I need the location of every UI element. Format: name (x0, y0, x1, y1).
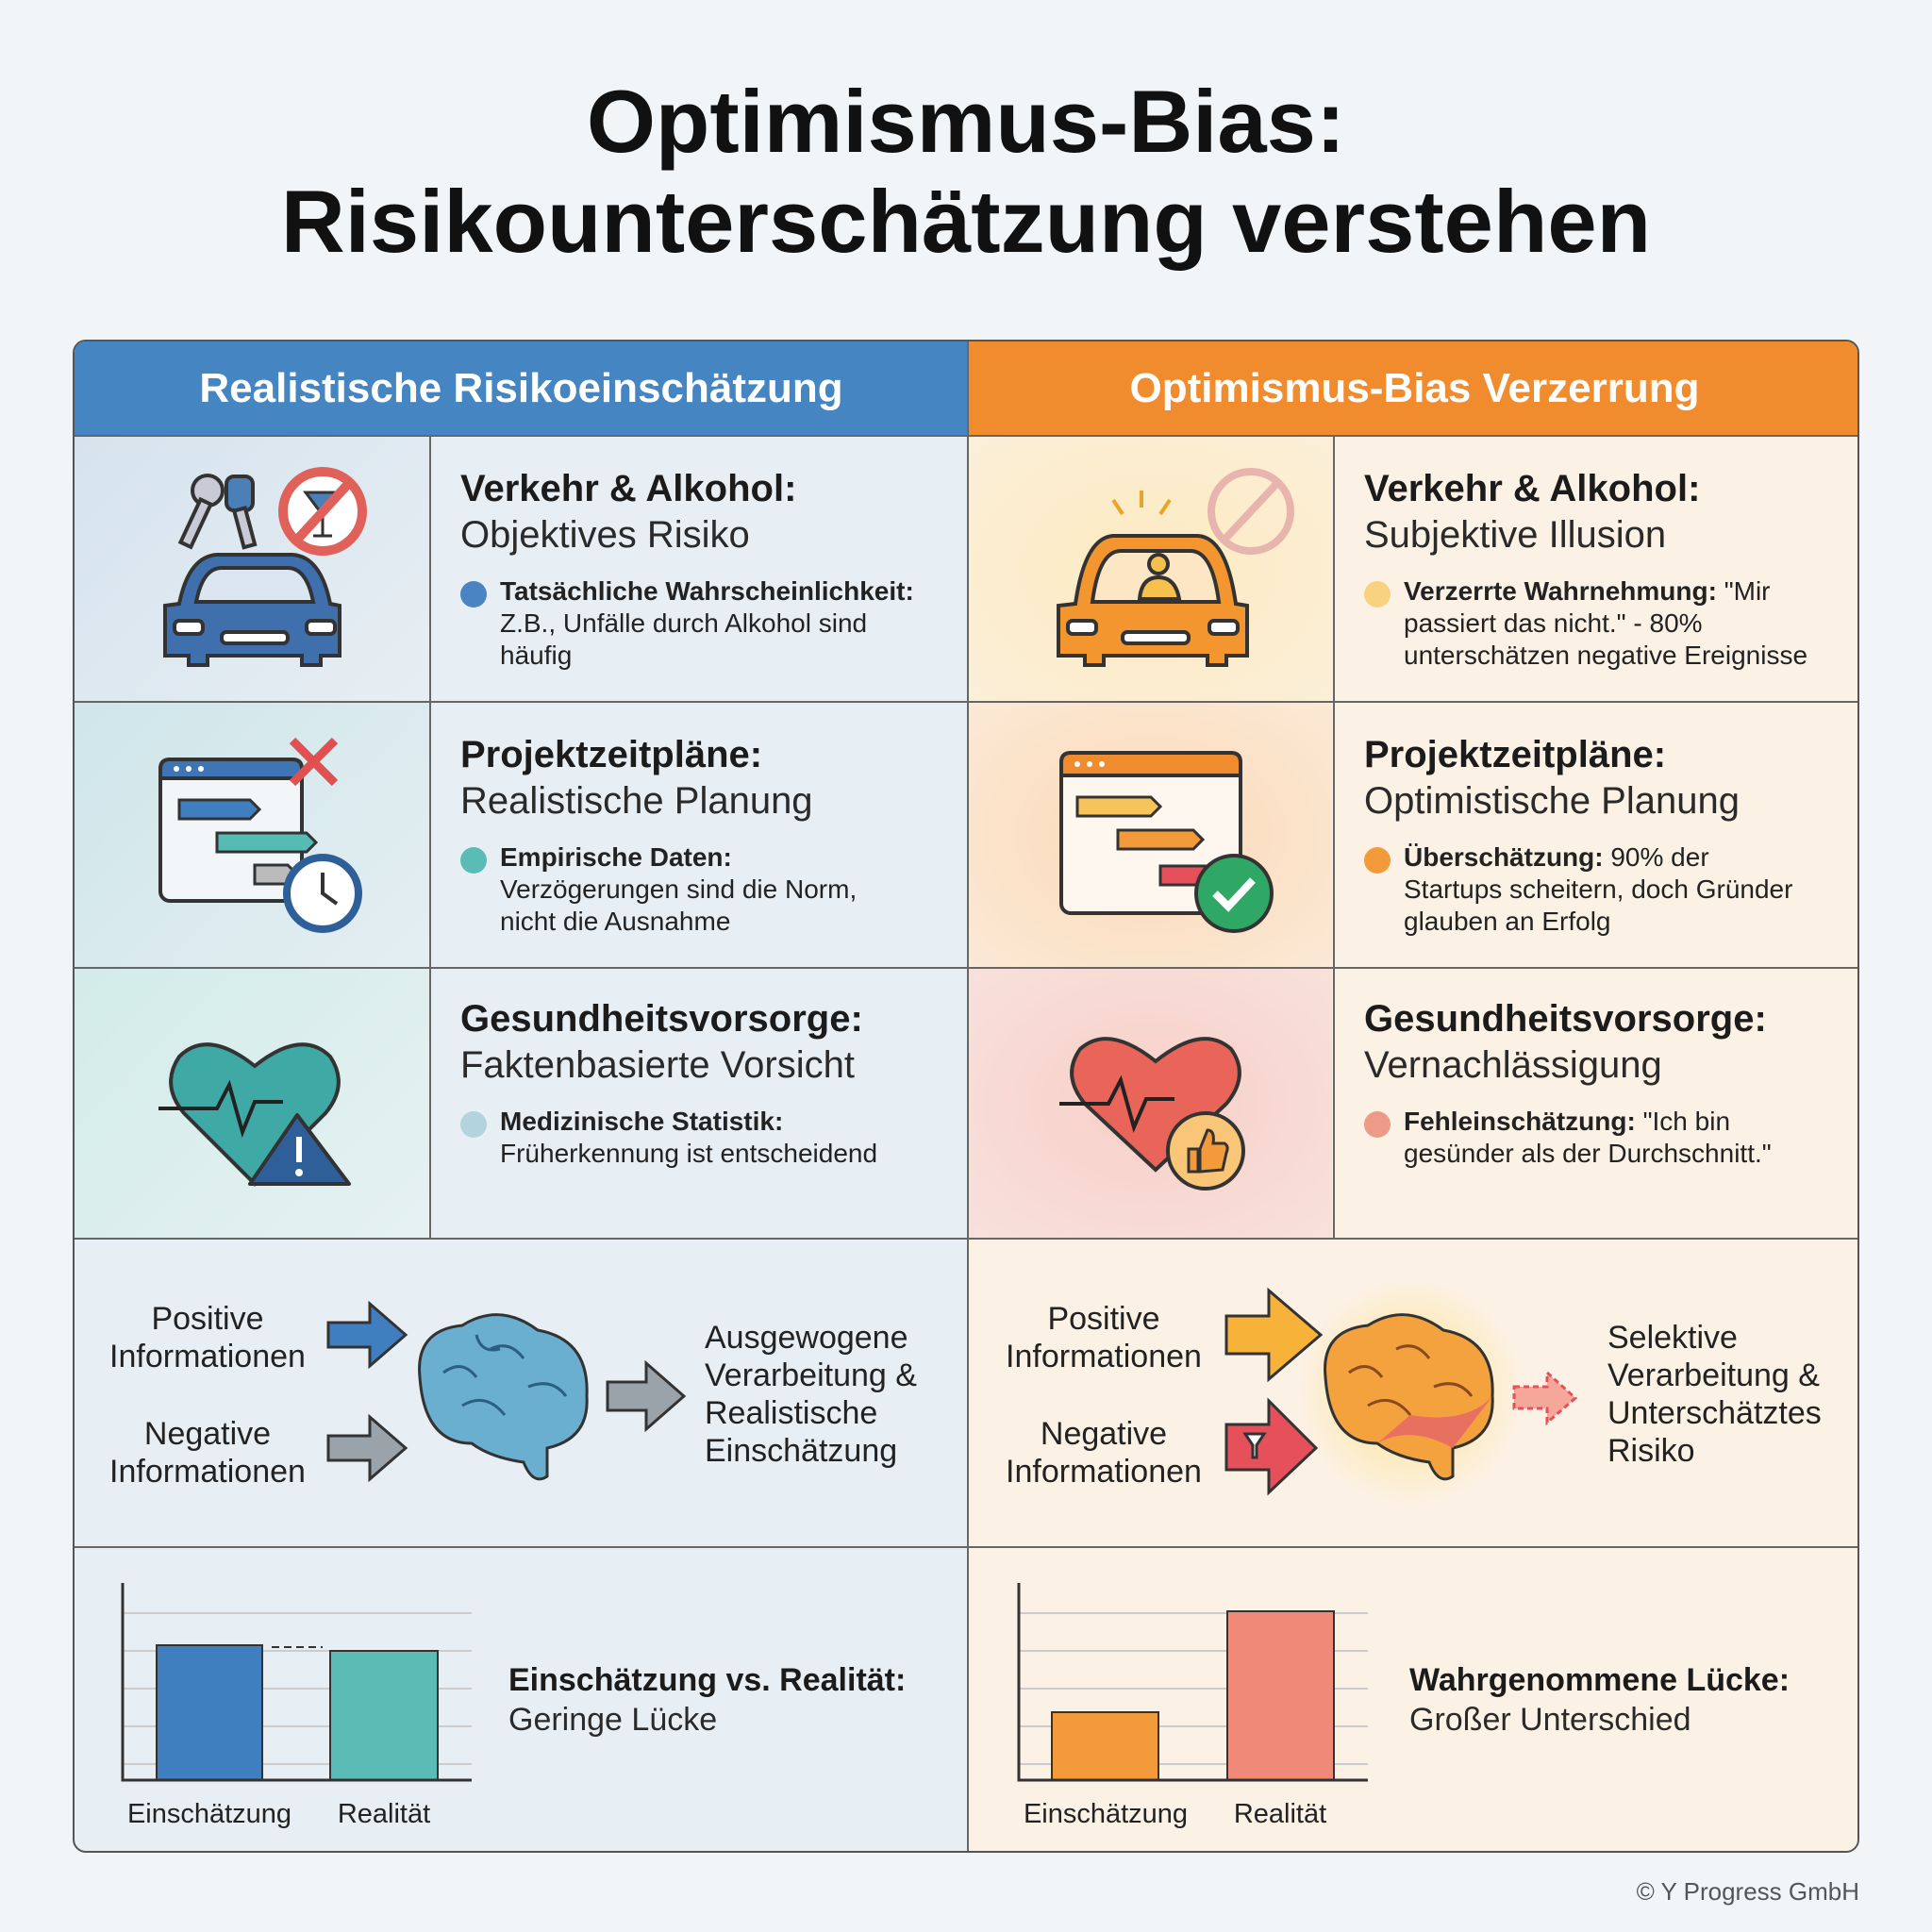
text: Gesundheit right: Gesundheitsvorsorge: (1364, 998, 1767, 1040)
title (281, 72, 1651, 271)
left header: Realistische Risikoeinschätzung (199, 365, 843, 411)
text: Projekt left: Realistische Planung (460, 780, 813, 822)
icon: heart with thumbs up (1059, 1037, 1245, 1191)
text: Projekt left: Verzögerungen sind die Norm, (500, 874, 857, 904)
text: positive info: Informationen (109, 1339, 306, 1374)
text: Verkehr left: Verkehr & Alkohol: (460, 468, 796, 509)
text: Projekt right: Überschätzung: 90% der (1404, 842, 1709, 872)
text: selective: Selektive (1607, 1320, 1738, 1356)
chart label left: Einschätzung vs. Realität: (508, 1662, 906, 1698)
text: Projekt right: glauben an Erfolg (1404, 907, 1611, 936)
text: selective: Verarbeitung & (1607, 1357, 1820, 1393)
text: Gesundheit left (460, 998, 877, 1168)
text: Verkehr right: passiert das nicht." - 80% (1404, 608, 1703, 638)
icon: keys, no alcohol, car (blue) (163, 467, 367, 667)
text: selective (1607, 1320, 1822, 1469)
text: positive info: Positive (1047, 1301, 1160, 1337)
text: negative info (1006, 1416, 1202, 1490)
chart label left: Geringe Lücke (508, 1702, 717, 1738)
text: balanced: Einschätzung (705, 1433, 897, 1469)
text: Verkehr left: Z.B., Unfälle durch Alkohol sind (500, 608, 867, 638)
arrows and brain (1224, 1287, 1577, 1496)
icon: timeline orange with check (1059, 751, 1274, 933)
text: selective: Risiko (1607, 1433, 1695, 1469)
text: balanced: Ausgewogene (705, 1320, 908, 1356)
text: Verkehr left (460, 468, 914, 670)
text: Projekt right (1364, 734, 1792, 936)
text: positive info (109, 1301, 306, 1374)
text: Gesundheit right: gesünder als der Durchschnitt." (1404, 1139, 1772, 1168)
text: Verkehr right: unterschätzen negative Ereignisse (1404, 641, 1807, 670)
text: positive info (1006, 1301, 1202, 1374)
text: Projekt right: Optimistische Planung (1364, 780, 1740, 822)
text: Gesundheit left: Früherkennung ist entscheidend (500, 1139, 877, 1168)
text: Projekt right: Startups scheitern, doch Gründer (1404, 874, 1792, 904)
text: Projekt left: Projektzeitpläne: (460, 734, 762, 775)
chart label right (1409, 1662, 1790, 1738)
text: Gesundheit right (1364, 998, 1772, 1168)
text: Projekt left: Empirische Daten: (500, 842, 732, 872)
text: Projekt left: nicht die Ausnahme (500, 907, 730, 936)
icon: car orange with driver (1057, 468, 1294, 667)
chart label right: Wahrgenommene Lücke: (1409, 1662, 1790, 1698)
text: Gesundheit left: Medizinische Statistik: (500, 1107, 783, 1136)
chart label left (508, 1662, 906, 1738)
text: Verkehr right: Verzerrte Wahrnehmung: "Mir (1404, 576, 1771, 606)
right header: Optimismus-Bias Verzerrung (1130, 365, 1699, 411)
text: Verkehr right (1364, 468, 1807, 670)
text: Gesundheit right: Vernachlässigung (1364, 1044, 1662, 1086)
title: Risikounterschätzung verstehen (281, 172, 1651, 271)
flow: left (109, 1300, 917, 1490)
text: negative info (109, 1416, 306, 1490)
chart label right: Großer Unterschied (1409, 1702, 1691, 1738)
icon: heart with warning (158, 1042, 351, 1187)
title: Optimismus-Bias: (587, 72, 1345, 171)
bar chart: right (1017, 1583, 1368, 1829)
left header (75, 341, 968, 436)
bar chart: right: Realität (1234, 1799, 1326, 1829)
bar chart: right: Einschätzung (1024, 1799, 1188, 1829)
text: negative info: Informationen (109, 1454, 306, 1490)
text: Verkehr left: Objektives Risiko (460, 514, 750, 556)
bar chart: left (121, 1583, 472, 1829)
text: balanced (705, 1320, 917, 1469)
text: positive info: Positive (151, 1301, 264, 1337)
bar chart: left: Realität (338, 1799, 430, 1829)
text: Projekt left (460, 734, 857, 936)
arrows and brain (326, 1300, 589, 1483)
text: Verkehr right: Subjektive Illusion (1364, 514, 1666, 556)
text: Verkehr left: Tatsächliche Wahrscheinlichkeit: (500, 576, 914, 606)
text: Gesundheit left: Gesundheitsvorsorge: (460, 998, 863, 1040)
text: Verkehr left: häufig (500, 641, 572, 670)
text: negative info: Informationen (1006, 1454, 1202, 1490)
text: positive info: Informationen (1006, 1339, 1202, 1374)
bar chart: left: Einschätzung (127, 1799, 291, 1829)
text: balanced: Realistische (705, 1395, 877, 1431)
text: Gesundheit right: Fehleinschätzung: "Ich bin (1404, 1107, 1730, 1136)
footer: © Y Progress GmbH (1637, 1877, 1859, 1906)
text: selective: Unterschätztes (1607, 1395, 1822, 1431)
icon: timeline blue with X and clock (158, 738, 362, 933)
text: balanced: Verarbeitung & (705, 1357, 917, 1393)
text: Verkehr right: Verkehr & Alkohol: (1364, 468, 1700, 509)
text: negative info: Negative (144, 1416, 271, 1452)
text: Projekt right: Projektzeitpläne: (1364, 734, 1666, 775)
right header (968, 341, 1861, 436)
text: negative info: Negative (1041, 1416, 1167, 1452)
main table (73, 340, 1859, 1853)
flow: right (1006, 1287, 1822, 1496)
text: Gesundheit left: Faktenbasierte Vorsicht (460, 1044, 855, 1086)
